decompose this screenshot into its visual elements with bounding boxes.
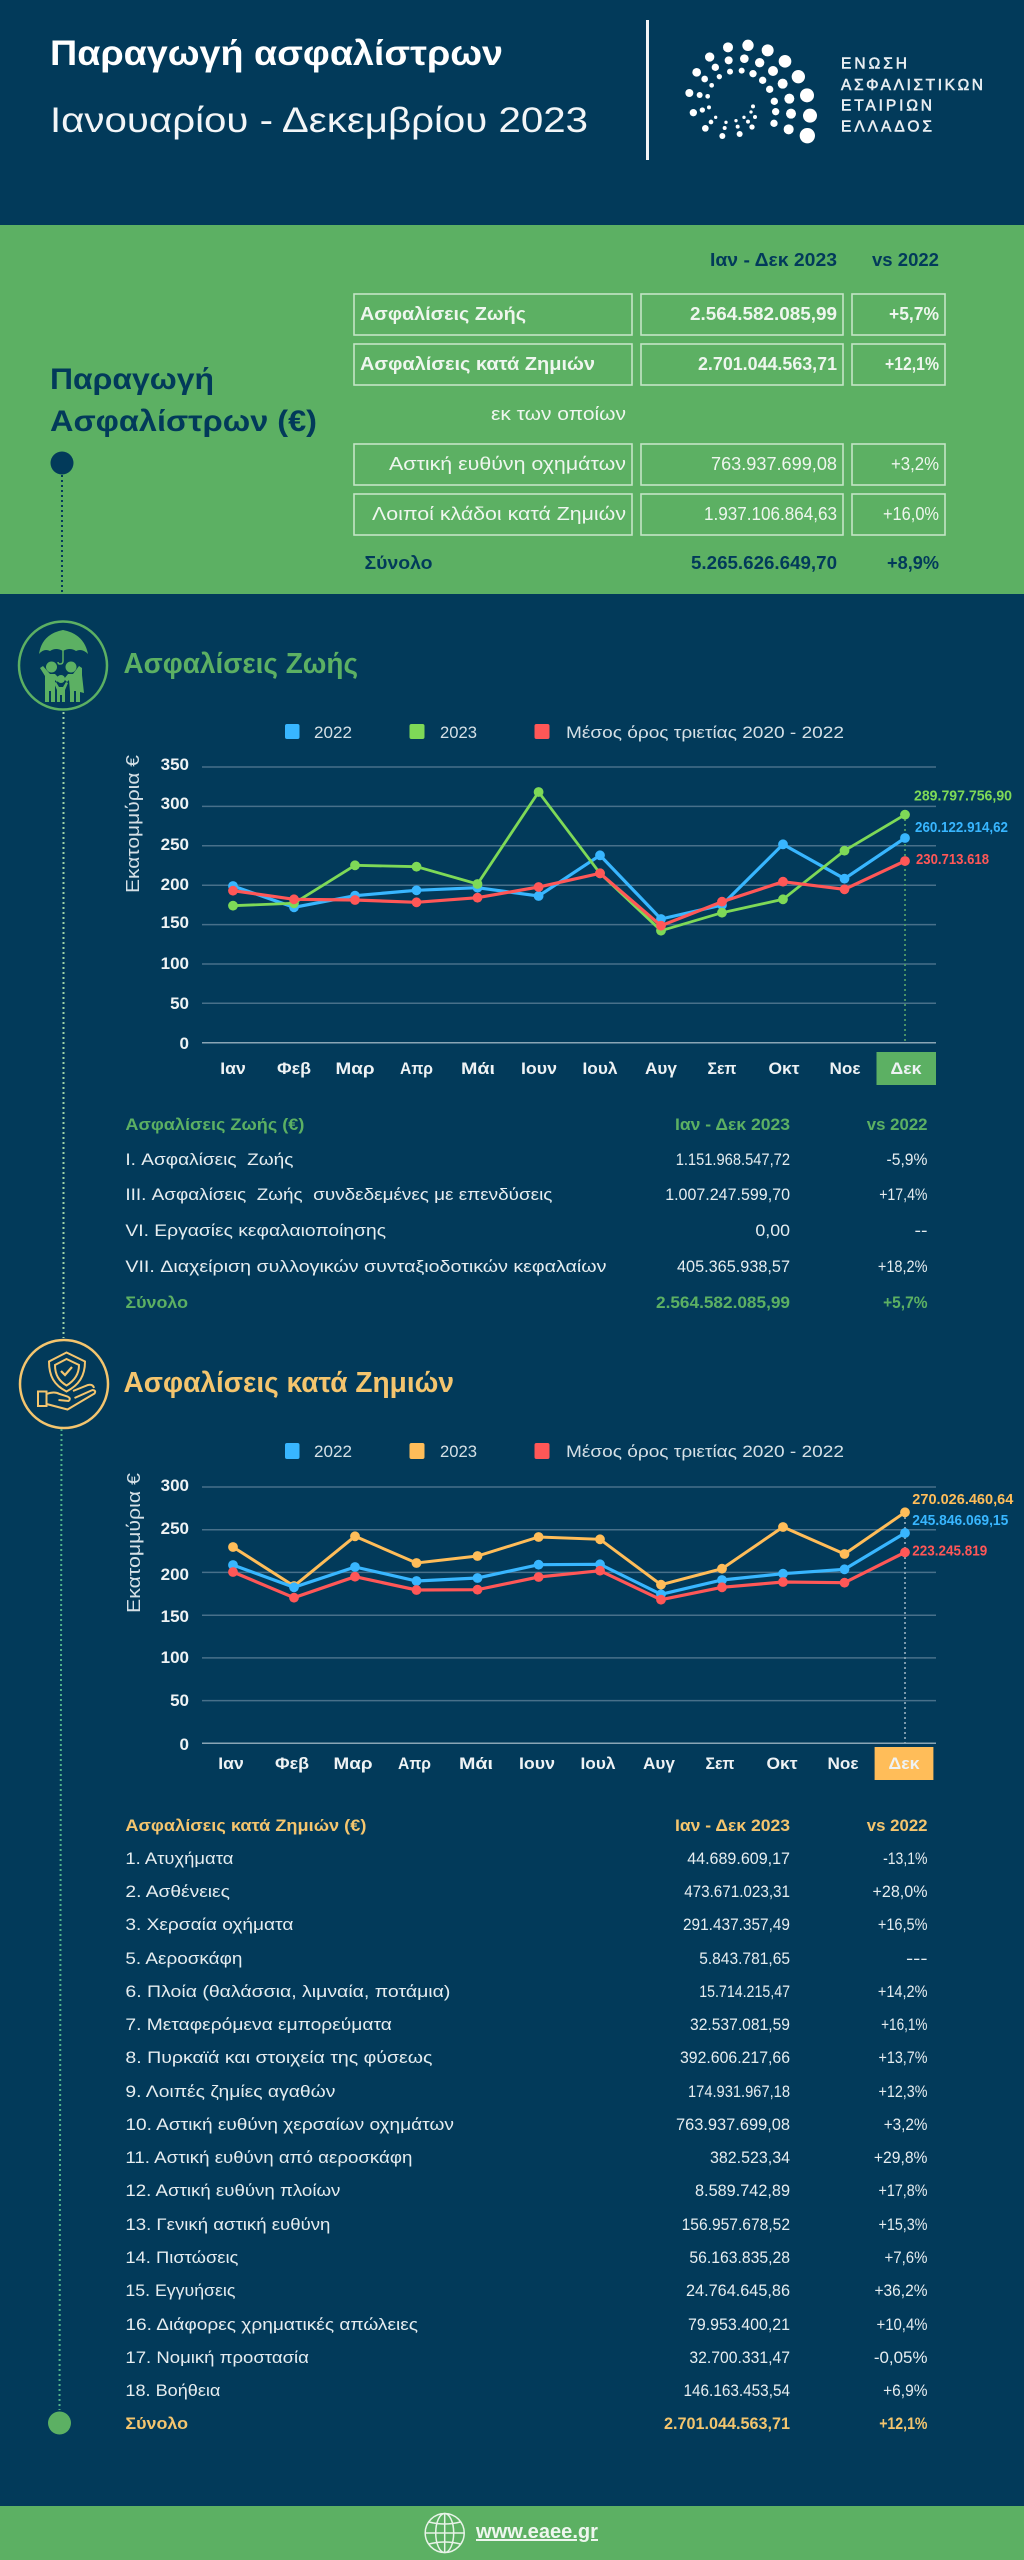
December value labels: 260.122.914,62: [915, 820, 1008, 836]
row VII: VII. Διαχείριση συλλογικών συνταξιοδοτικών κεφαλαίων: [125, 1257, 606, 1276]
table header: Ιαν - Δεκ 2023: [675, 1816, 790, 1835]
x axis labels: [218, 1754, 920, 1773]
footer: [0, 2506, 1024, 2560]
x axis labels: Ιουν: [521, 1059, 557, 1078]
title: Ιανουαρίου - Δεκεμβρίου 2023: [50, 101, 588, 140]
row: other non-life classes: [354, 494, 945, 535]
summary column headers: [710, 250, 939, 270]
row total: 2.701.044.563,71: [664, 2414, 790, 2433]
row: non-life insurance: +12,1%: [885, 354, 939, 374]
legend: non-life chart: 2022: [314, 1442, 352, 1461]
row: non-life insurance: Ασφαλίσεις κατά Ζημιών: [360, 354, 595, 374]
table header: Ασφαλίσεις Ζωής (€): [125, 1115, 304, 1134]
row VII: 405.365.938,57: [677, 1257, 790, 1276]
row 18: +6,9%: [883, 2381, 928, 2400]
y axis labels: 300: [161, 1476, 189, 1495]
row 12: [125, 2181, 927, 2200]
row: life insurance: [354, 294, 945, 335]
y axis labels: 250: [161, 1519, 189, 1538]
row III: [125, 1185, 927, 1204]
y axis labels: 0: [180, 1735, 189, 1754]
row 14: +7,6%: [884, 2248, 928, 2267]
row VI: [125, 1221, 927, 1240]
row 2: [125, 1882, 927, 1901]
row 8: [125, 2048, 927, 2067]
row: life insurance: +5,7%: [889, 304, 939, 324]
x axis labels: Νοε: [830, 1059, 860, 1078]
series: 2023: [233, 1512, 905, 1586]
legend: non-life chart: [285, 1442, 844, 1461]
y axis labels: 150: [161, 1607, 189, 1626]
row 11: 11. Αστική ευθύνη από αεροσκάφη: [125, 2148, 412, 2167]
x axis labels: Μαρ: [336, 1059, 374, 1078]
logo wordmark: ΕΝΩΣΗ: [841, 56, 907, 73]
row 3: [125, 1915, 927, 1934]
December value labels: [912, 1492, 1013, 1560]
table header: Ιαν - Δεκ 2023: [675, 1115, 790, 1134]
row 12: 12. Αστική ευθύνη πλοίων: [125, 2181, 340, 2200]
header: [50, 20, 983, 160]
x axis labels: Αυγ: [645, 1059, 678, 1078]
row 12: 8.589.742,89: [695, 2181, 790, 2200]
row I: [125, 1150, 927, 1169]
timeline start marker: [50, 452, 74, 592]
series: three-year average: [233, 1552, 905, 1600]
row 10: [125, 2115, 927, 2134]
row 9: 9. Λοιπές ζημίες αγαθών: [125, 2082, 335, 2101]
table: life insurance breakdown: [125, 1115, 927, 1312]
legend: life chart: 2023: [440, 723, 477, 742]
row III: III. Ασφαλίσεις Ζωής συνδεδεμένες με επενδύσεις: [125, 1185, 552, 1204]
row 7: 7. Μεταφερόμενα εμπορεύματα: [125, 2015, 392, 2034]
row 14: 56.163.835,28: [689, 2248, 790, 2267]
row 9: [125, 2082, 927, 2101]
logo: dotted arc emblem: [685, 40, 817, 143]
row 17: 32.700.331,47: [689, 2348, 790, 2367]
heading: non-life insurance: Ασφαλίσεις κατά Ζημιών: [124, 1367, 454, 1399]
x axis labels: Ιουν: [519, 1754, 555, 1773]
row 3: 291.437.357,49: [683, 1915, 790, 1934]
row 1: -13,1%: [883, 1849, 928, 1868]
x axis labels: Δεκ: [890, 1059, 922, 1078]
logo wordmark: [841, 56, 983, 136]
line chart: non-life insurance monthly premiums: [124, 1473, 1013, 1780]
row VI: --: [914, 1221, 928, 1240]
x axis labels: [220, 1059, 922, 1078]
table: non-life insurance breakdown: [125, 1816, 927, 2433]
row 6: 6. Πλοία (θαλάσσια, λιμναία, ποτάμια): [125, 1982, 450, 2001]
row 11: 382.523,34: [710, 2148, 790, 2167]
row 13: 156.957.678,52: [682, 2215, 790, 2234]
row VII: [125, 1257, 927, 1276]
row 2: +28,0%: [872, 1882, 928, 1901]
y axis labels: 100: [161, 1648, 189, 1667]
row total: [125, 2414, 927, 2433]
row 6: +14,2%: [878, 1982, 928, 2001]
row: motor liability: [354, 444, 945, 485]
y axis labels: 100: [161, 954, 189, 973]
December value labels: 230.713.618: [916, 852, 989, 868]
row 16: 16. Διάφορες χρηματικές απώλειες: [125, 2315, 418, 2334]
icon: globe: [425, 2514, 464, 2552]
title: Παραγωγή ασφαλίστρων: [50, 34, 503, 73]
row 13: +15,3%: [878, 2215, 928, 2234]
table header: vs 2022: [867, 1115, 928, 1134]
heading: life insurance: Ασφαλίσεις Ζωής: [124, 648, 358, 680]
series: 2023: [233, 792, 905, 931]
x axis labels: Σεπ: [706, 1754, 734, 1773]
December value labels: 270.026.460,64: [912, 1492, 1013, 1508]
row I: I. Ασφαλίσεις Ζωής: [125, 1150, 293, 1169]
row 3: +16,5%: [878, 1915, 928, 1934]
x axis labels: Σεπ: [708, 1059, 736, 1078]
row 17: [125, 2348, 927, 2367]
y axis labels: 50: [170, 1691, 189, 1710]
connector: dotted timeline, life section: [62, 712, 64, 1338]
row 14: 14. Πιστώσεις: [125, 2248, 238, 2267]
x axis labels: Φεβ: [277, 1059, 311, 1078]
legend: non-life chart: Μέσος όρος τριετίας 2020 - 2022: [566, 1442, 844, 1461]
x axis labels: Ιουλ: [582, 1059, 618, 1078]
row: life insurance: Ασφαλίσεις Ζωής: [360, 304, 526, 324]
row 10: 763.937.699,08: [676, 2115, 790, 2134]
row total: Σύνολο: [125, 1293, 188, 1312]
row: motor liability: 763.937.699,08: [711, 454, 837, 474]
row III: 1.007.247.599,70: [665, 1185, 790, 1204]
row 18: 18. Βοήθεια: [125, 2381, 221, 2400]
table header: Ασφαλίσεις κατά Ζημιών (€): [125, 1816, 366, 1835]
row 2: 2. Ασθένειες: [125, 1882, 230, 1901]
row 6: [125, 1982, 927, 2001]
row total: 2.564.582.085,99: [656, 1293, 790, 1312]
row 5: 5. Αεροσκάφη: [125, 1949, 242, 1968]
x axis labels: Ιουλ: [580, 1754, 616, 1773]
December value labels: 245.846.069,15: [912, 1513, 1008, 1529]
x axis labels: Αυγ: [643, 1754, 676, 1773]
row 6: 15.714.215,47: [699, 1982, 790, 2001]
series: 2022: [233, 838, 905, 919]
row 8: +13,7%: [878, 2048, 928, 2067]
row 15: 15. Εγγυήσεις: [125, 2281, 235, 2300]
row: non-life insurance: [354, 344, 945, 385]
row 16: 79.953.400,21: [688, 2315, 790, 2334]
heading: premium production: Ασφαλίστρων (€): [50, 405, 317, 438]
summary column headers: Ιαν - Δεκ 2023: [710, 250, 837, 270]
row 17: -0,05%: [874, 2348, 928, 2367]
row III: +17,4%: [879, 1185, 928, 1204]
row I: -5,9%: [886, 1150, 928, 1169]
x axis labels: Απρ: [400, 1059, 433, 1078]
row 8: 8. Πυρκαϊά και στοιχεία της φύσεως: [125, 2048, 432, 2067]
row 12: +17,8%: [878, 2181, 928, 2200]
row 1: 1. Ατυχήματα: [125, 1849, 234, 1868]
sub-caption: εκ των οποίων: [491, 404, 626, 424]
y axis labels: 250: [161, 835, 189, 854]
row 1: 44.689.609,17: [687, 1849, 790, 1868]
row 16: +10,4%: [876, 2315, 928, 2334]
logo wordmark: ΕΛΛΑΔΟΣ: [841, 119, 932, 136]
row 15: 24.764.645,86: [686, 2281, 790, 2300]
y axis labels: 350: [161, 755, 189, 774]
row: summary total: Σύνολο: [364, 553, 432, 573]
row: motor liability: Αστική ευθύνη οχημάτων: [389, 454, 626, 474]
row 11: [125, 2148, 927, 2167]
x axis labels: Απρ: [398, 1754, 431, 1773]
x axis labels: Ιαν: [220, 1059, 246, 1078]
y axis title: Εκατομμύρια €: [123, 755, 143, 893]
row 9: +12,3%: [878, 2082, 928, 2101]
x axis labels: Οκτ: [766, 1754, 798, 1773]
row 13: [125, 2215, 927, 2234]
x axis labels: Οκτ: [768, 1059, 800, 1078]
December value labels: 289.797.756,90: [914, 788, 1012, 804]
row 5: 5.843.781,65: [699, 1949, 790, 1968]
row: summary total: +8,9%: [887, 553, 939, 573]
x axis labels: Νοε: [828, 1754, 858, 1773]
heading: premium production: [50, 363, 317, 438]
row 10: 10. Αστική ευθύνη χερσαίων οχημάτων: [125, 2115, 454, 2134]
y axis labels: 200: [161, 875, 189, 894]
table header: [125, 1816, 927, 1835]
row 3: 3. Χερσαία οχήματα: [125, 1915, 294, 1934]
table header: [125, 1115, 927, 1134]
y axis labels: [161, 755, 189, 1053]
row I: 1.151.968.547,72: [676, 1150, 790, 1169]
y axis labels: 200: [161, 1565, 189, 1584]
row total: +12,1%: [879, 2414, 928, 2433]
connector: dotted timeline, non-life section: [60, 1429, 62, 2410]
y axis title: Εκατομμύρια €: [124, 1473, 144, 1613]
legend: life chart: 2022: [314, 723, 352, 742]
logo wordmark: ΑΣΦΑΛΙΣΤΙΚΩΝ: [841, 77, 983, 94]
row 11: +29,8%: [874, 2148, 928, 2167]
table header: vs 2022: [867, 1816, 928, 1835]
legend: life chart: [285, 723, 844, 742]
x axis labels: Μαρ: [334, 1754, 372, 1773]
x axis labels: Μάι: [459, 1754, 493, 1773]
row VII: +18,2%: [878, 1257, 928, 1276]
highlight: December: [876, 814, 936, 1085]
row 7: [125, 2015, 927, 2034]
row 5: [125, 1949, 927, 1968]
row VI: 0,00: [755, 1221, 790, 1240]
row 14: [125, 2248, 927, 2267]
x axis labels: Φεβ: [275, 1754, 309, 1773]
row: summary total: 5.265.626.649,70: [691, 553, 837, 573]
row 7: +16,1%: [881, 2015, 928, 2034]
row 16: [125, 2315, 927, 2334]
row 7: 32.537.081,59: [690, 2015, 790, 2034]
row 2: 473.671.023,31: [684, 1882, 790, 1901]
December value labels: [914, 788, 1012, 868]
row 18: 146.163.453,54: [684, 2381, 790, 2400]
legend: life chart: Μέσος όρος τριετίας 2020 - 2022: [566, 723, 844, 742]
row 1: [125, 1849, 927, 1868]
row 10: +3,2%: [884, 2115, 928, 2134]
row 15: [125, 2281, 927, 2300]
row total: [125, 1293, 927, 1312]
row 5: ---: [906, 1949, 928, 1968]
series: three-year average: [233, 861, 905, 926]
heading: premium production: Παραγωγή: [50, 363, 214, 396]
icon: hand holding shield: [20, 1340, 108, 1428]
y axis labels: 0: [180, 1034, 189, 1053]
panel: premium production summary: [0, 225, 1024, 594]
title: [50, 34, 588, 140]
logo wordmark: ΕΤΑΙΡΙΩΝ: [841, 98, 932, 114]
row: other non-life classes: Λοιποί κλάδοι κατά Ζημιών: [372, 504, 626, 524]
highlight: December: [875, 1512, 933, 1780]
row total: +5,7%: [883, 1293, 928, 1312]
row total: Σύνολο: [125, 2414, 188, 2433]
y axis labels: 50: [170, 994, 189, 1013]
x axis labels: Ιαν: [218, 1754, 244, 1773]
December value labels: 223.245.819: [912, 1544, 987, 1560]
row 15: +36,2%: [874, 2281, 928, 2300]
row 8: 392.606.217,66: [680, 2048, 790, 2067]
row 13: 13. Γενική αστική ευθύνη: [125, 2215, 330, 2234]
x axis labels: Δεκ: [888, 1754, 920, 1773]
y axis labels: 150: [161, 913, 189, 932]
line chart: life insurance monthly premiums: [123, 755, 1012, 1085]
icon: umbrella over family: [19, 622, 107, 710]
row: motor liability: +3,2%: [891, 454, 939, 474]
row 17: 17. Νομική προστασία: [125, 2348, 309, 2367]
row: other non-life classes: 1.937.106.864,63: [704, 504, 837, 524]
y axis labels: 300: [161, 794, 189, 813]
timeline end marker: [48, 2412, 71, 2434]
row: summary total: [364, 553, 939, 573]
row 18: [125, 2381, 927, 2400]
x axis labels: Μάι: [461, 1059, 495, 1078]
y axis labels: [161, 1476, 189, 1754]
summary column headers: vs 2022: [872, 250, 939, 270]
row: other non-life classes: +16,0%: [883, 504, 939, 524]
series: 2022: [233, 1533, 905, 1594]
legend: non-life chart: 2023: [440, 1442, 477, 1461]
row VI: VI. Εργασίες κεφαλαιοποίησης: [125, 1221, 386, 1240]
row: life insurance: 2.564.582.085,99: [690, 304, 837, 324]
row: non-life insurance: 2.701.044.563,71: [698, 354, 837, 374]
website link: www.eaee.gr: [475, 2521, 598, 2543]
row 9: 174.931.967,18: [688, 2082, 790, 2101]
